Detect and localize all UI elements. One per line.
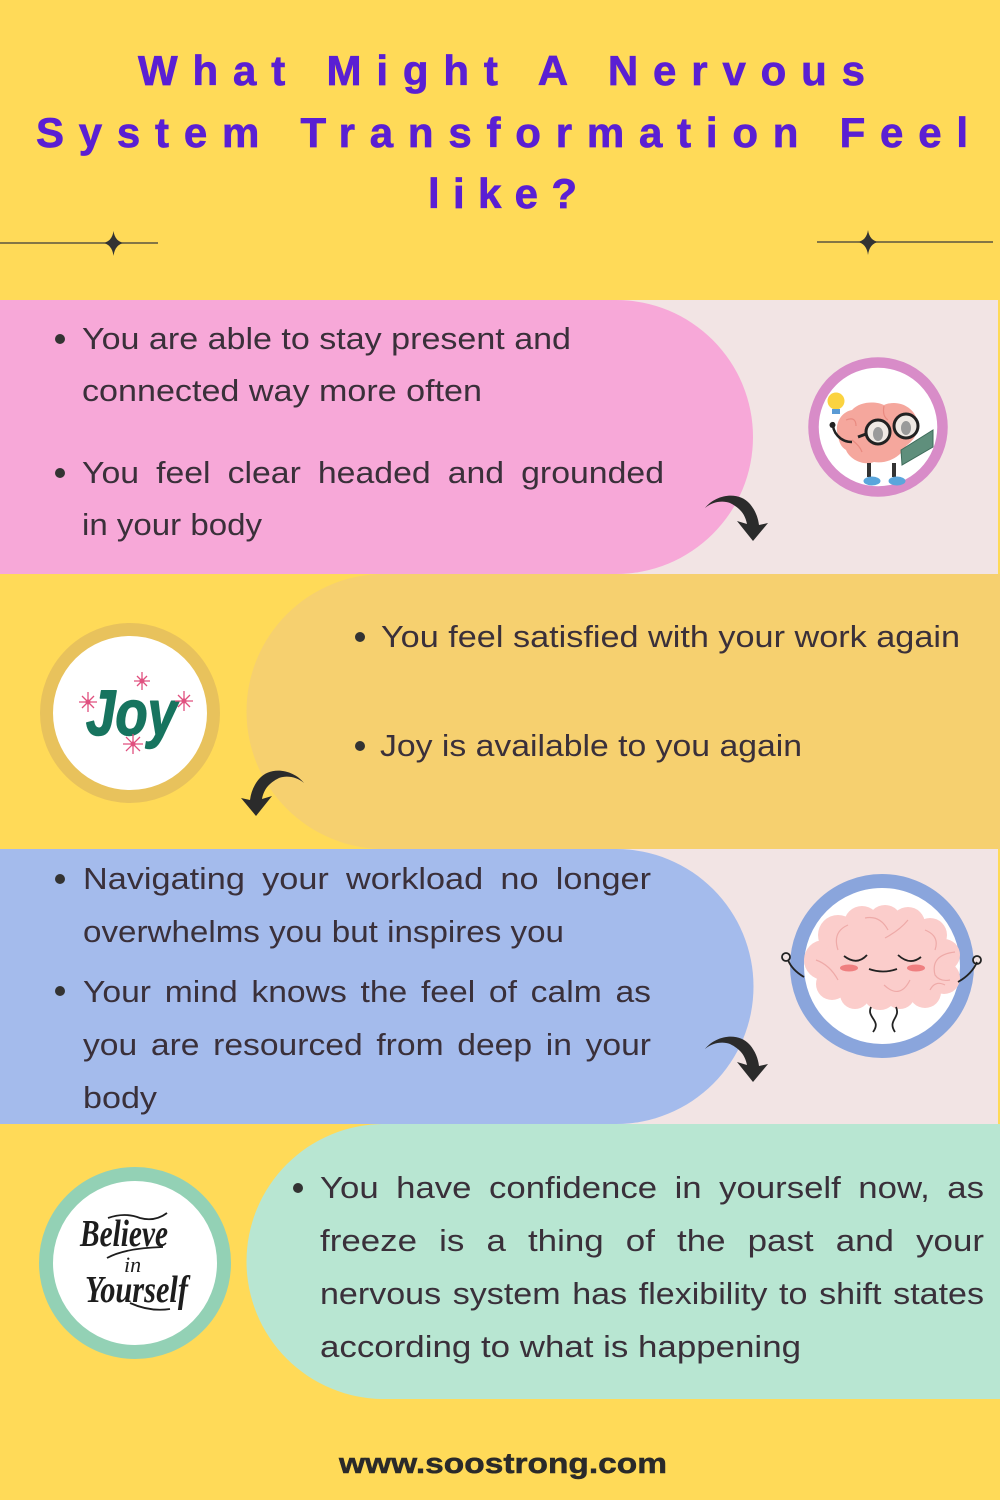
icon: joy badge (46, 630, 214, 796)
bullet text: calm mind (55, 974, 651, 1115)
bullet text: satisfied with work: You feel satisfied with your work again (381, 619, 960, 654)
bullet text: clear headed: in your body (82, 507, 263, 542)
icon: meditating brain (782, 881, 981, 1051)
panel: satisfied and joy (46, 574, 1000, 849)
arrow (705, 1037, 768, 1082)
bullet text: present and connected: connected way more often (82, 373, 482, 408)
bullet text: navigating workload: Navigating your workload no longer (83, 861, 651, 896)
bullet text: confidence: according to what is happening (320, 1329, 801, 1364)
arrow (705, 496, 768, 541)
bullet text: clear headed (55, 455, 664, 542)
bullet text: calm mind: body (83, 1080, 158, 1115)
bullet text: confidence: You have confidence in yourself now, as (320, 1170, 984, 1205)
title (36, 47, 968, 217)
panel: present and grounded (0, 300, 998, 574)
bullet text: present and connected (55, 321, 571, 408)
icon: believe in yourself badge: in (124, 1252, 141, 1277)
left sparkle divider (0, 231, 158, 256)
panel: confidence (46, 1124, 1000, 1399)
icon: believe in yourself badge: Yourself (85, 1269, 191, 1311)
icon: joy badge: Joy (86, 677, 180, 749)
bullet text: navigating workload: overwhelms you but inspires you (83, 914, 564, 949)
bullet text: present and connected: You are able to stay present and (82, 321, 571, 356)
footer website: www.soostrong.com (338, 1448, 667, 1480)
icon: believe in yourself badge (46, 1174, 224, 1352)
bullet text: calm mind: Your mind knows the feel of calm as (83, 974, 651, 1009)
right sparkle divider (817, 230, 993, 255)
bullet text: clear headed: You feel clear headed and grounded (82, 455, 664, 490)
title: What Might A Nervous (138, 47, 865, 94)
bullet text: joy available: Joy is available to you again (380, 728, 802, 763)
bullet text: navigating workload (55, 861, 651, 949)
title: System Transformation Feel (36, 109, 968, 156)
arrow (241, 771, 304, 816)
icon: believe in yourself badge: Believe (79, 1213, 168, 1255)
panel: workload and calm (0, 849, 998, 1124)
bullet text: confidence: nervous system has flexibility to shift states (320, 1276, 984, 1311)
bullet text: calm mind: you are resourced from deep in your (83, 1027, 651, 1062)
bullet text: confidence (293, 1170, 984, 1364)
bullet text: confidence: freeze is a thing of the past and your (320, 1223, 984, 1258)
title: like? (428, 170, 577, 217)
icon: brain reading (814, 362, 942, 492)
